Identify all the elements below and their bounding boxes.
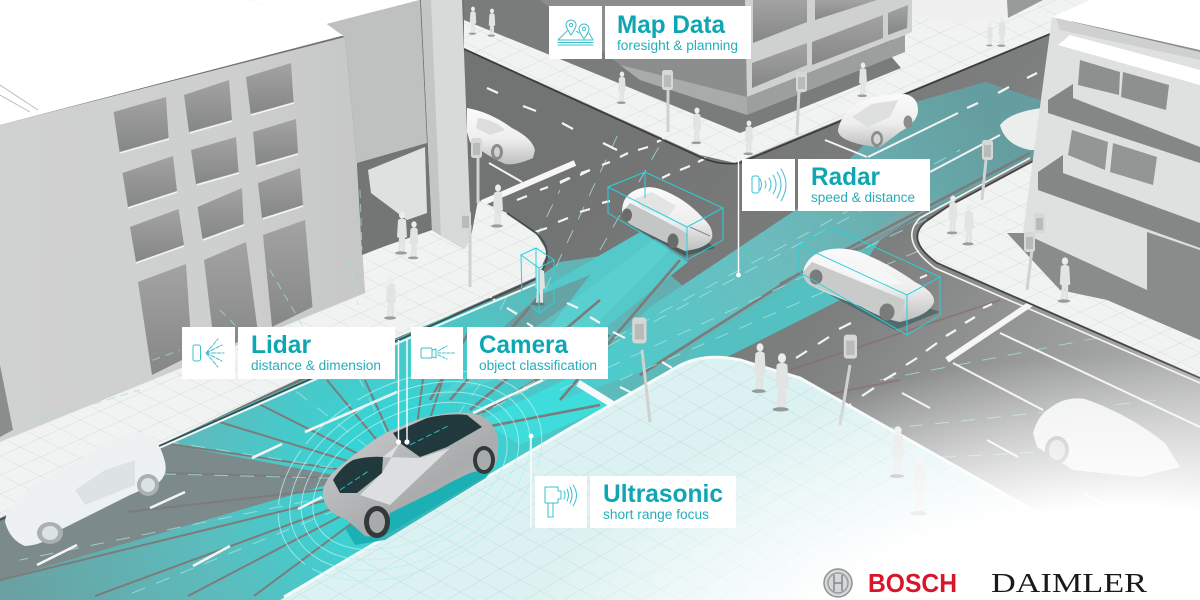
connector: radar <box>736 158 741 277</box>
top building shadow <box>464 0 901 133</box>
logo: Bosch: BOSCH <box>868 568 957 598</box>
lower right sidewalk <box>280 357 1190 600</box>
car: boxed coupe <box>799 227 940 335</box>
main car <box>323 412 498 545</box>
scan lines on left building <box>40 190 362 420</box>
icon: lidar fan <box>193 339 224 367</box>
sensor rays <box>0 153 1030 596</box>
pedestrians <box>384 7 1070 516</box>
logo: Daimler: DAIMLER <box>991 568 1147 598</box>
ground shadow and floor <box>1007 232 1200 340</box>
logo: Bosch <box>824 568 957 598</box>
label: Ultrasonic <box>535 476 736 528</box>
car: parked SUV top right <box>838 94 918 147</box>
label: Lidar <box>182 327 395 379</box>
label: Lidar: Lidar <box>251 331 311 359</box>
ultrasonic arcs around car <box>242 329 578 600</box>
car: boxed sedan <box>608 172 723 260</box>
right sidewalk <box>912 100 1200 383</box>
pedestrian with bounding box <box>521 248 554 313</box>
car: fading hatchback bottom right <box>1033 398 1180 477</box>
label: Lidar: distance & dimension <box>251 358 381 373</box>
road markings <box>37 73 1200 566</box>
sensor field: lidar fan on road <box>0 232 700 600</box>
label: Map Data <box>549 6 751 59</box>
grey wedge left of car <box>0 443 350 580</box>
bounding box <box>608 172 723 260</box>
car: white hatchback bottom left <box>5 432 166 546</box>
right building <box>1007 0 1200 340</box>
distant white car <box>1000 108 1042 150</box>
label: Map Data: Map Data <box>617 11 726 39</box>
top curb <box>464 34 1050 164</box>
top building <box>540 0 912 115</box>
label: Camera: object classification <box>479 358 597 373</box>
connector: ultrasonic <box>529 434 533 528</box>
label: Radar <box>742 159 930 211</box>
bounding box <box>799 227 940 335</box>
icon: ultrasonic sensor <box>545 485 576 517</box>
icon: radar waves <box>752 169 786 201</box>
connector: lidar and camera <box>396 340 410 445</box>
left sidewalk <box>0 200 548 520</box>
label: Map Data: foresight & planning <box>617 38 738 53</box>
traffic lights <box>460 70 1045 425</box>
label: Radar: speed & distance <box>811 190 915 205</box>
label: Radar: Radar <box>811 163 880 191</box>
label: Camera <box>411 327 608 379</box>
left building <box>0 0 471 443</box>
top sidewalk <box>464 0 1110 163</box>
label: Camera: Camera <box>479 331 569 359</box>
sensor field: radar beam <box>560 82 1040 400</box>
windows <box>114 63 312 375</box>
label: Ultrasonic: short range focus <box>603 507 709 522</box>
icon: camera <box>421 346 455 359</box>
far corner building <box>912 0 1055 24</box>
label: Ultrasonic: Ultrasonic <box>603 480 723 508</box>
car: parked top left <box>467 108 535 164</box>
icon: map pins <box>558 20 593 45</box>
